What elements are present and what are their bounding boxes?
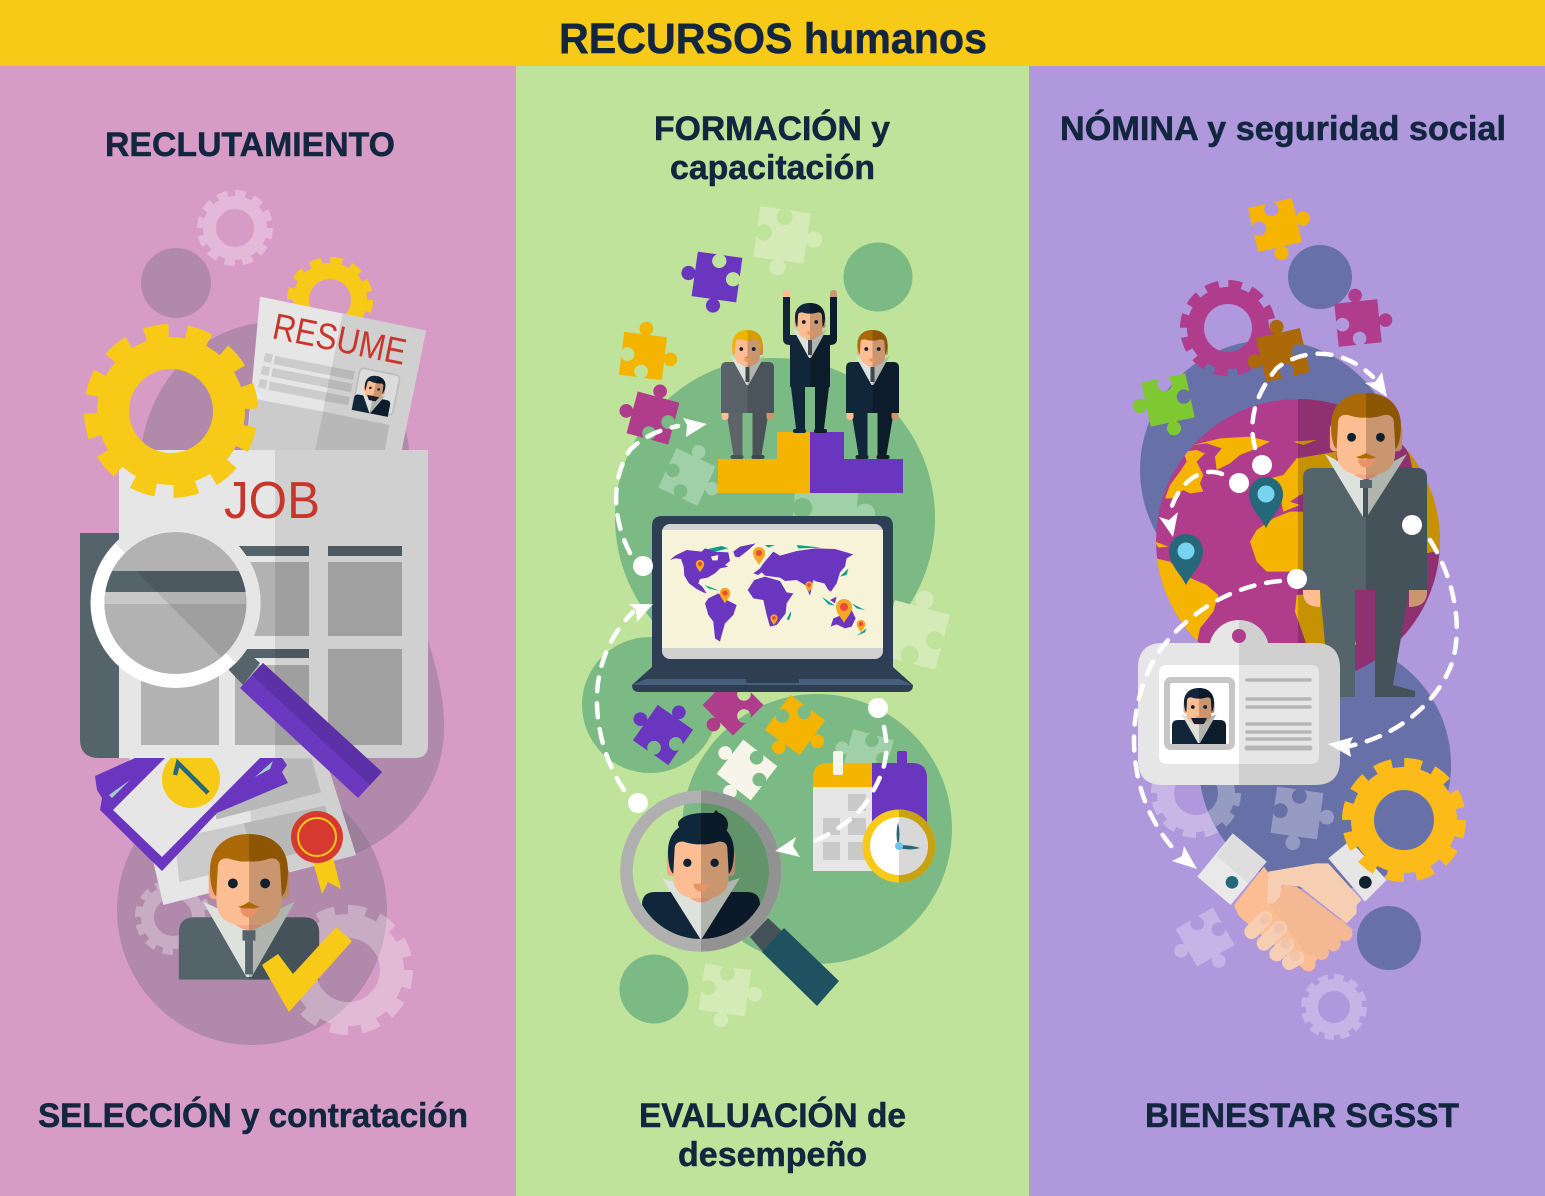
map pins <box>1169 477 1283 585</box>
dashed arrow: around ID card <box>1134 569 1307 869</box>
puzzle: purple <box>676 250 742 316</box>
ribbon seal <box>291 811 343 894</box>
globe <box>1155 399 1442 683</box>
puzzle: magenta <box>614 376 683 444</box>
resume sheet: RESUME <box>269 306 410 373</box>
heading: reclutamiento: RECLUTAMIENTO <box>105 126 395 164</box>
newspaper: JOB <box>224 472 320 530</box>
person: employee <box>1303 393 1427 697</box>
purple ticket stack <box>95 750 288 871</box>
background circles <box>117 248 444 1045</box>
heading: selección y contratación: SELECCIÓN y contratación <box>38 1097 468 1135</box>
gear: yellow <box>1347 763 1461 877</box>
dashed arrow: to laptop <box>597 604 653 813</box>
person: right winner <box>846 330 899 459</box>
puzzle: purple low <box>622 687 700 765</box>
laptop with world map <box>632 516 913 692</box>
header band <box>0 0 1545 66</box>
person: centre winner <box>783 290 837 433</box>
gear: pale bottom left <box>138 882 208 952</box>
handshake <box>1197 833 1387 970</box>
gear: big yellow <box>77 317 265 505</box>
check mark <box>262 927 352 1012</box>
gear: yellow small <box>290 260 370 340</box>
puzzle: behind calendar <box>827 726 894 793</box>
illustration: training and evaluation <box>582 206 954 1032</box>
panel: nómina background <box>1029 65 1545 1196</box>
puzzle: yellow top <box>1248 195 1318 265</box>
dashed arrow: to podium <box>616 418 707 576</box>
magnifier with candidate <box>626 790 839 1006</box>
heading: bienestar sgsst: BIENESTAR SGSST <box>1145 1097 1459 1135</box>
gear: magenta <box>1184 284 1272 372</box>
panel: formación background <box>516 65 1029 1196</box>
heading: evaluación de desempeño: desempeño <box>678 1136 867 1174</box>
heading: formación y capacitación: FORMACIÓN y <box>654 110 890 148</box>
heading: formación y capacitación <box>654 110 890 187</box>
clock <box>862 810 936 882</box>
puzzle: light bottom <box>1164 907 1241 984</box>
puzzle: translucent centre <box>1269 787 1337 855</box>
puzzle: yellow low <box>757 695 836 773</box>
panel: reclutamiento background <box>0 65 516 1196</box>
title: RECURSOS humanos <box>559 15 987 63</box>
background circles <box>1140 245 1451 970</box>
puzzle: cream <box>699 732 777 810</box>
resume sheet <box>246 297 426 450</box>
newspaper <box>80 450 428 758</box>
illustration: payroll and wellbeing <box>1128 195 1461 1037</box>
puzzle: behind laptop <box>791 457 879 546</box>
person: left winner <box>721 330 774 459</box>
magnifying glass <box>98 518 382 798</box>
heading: formación y capacitación: capacitación <box>670 149 875 187</box>
calendar <box>813 751 927 871</box>
illustration: recruitment and selection <box>77 194 444 1045</box>
selected candidate <box>179 834 319 980</box>
light gear bottom <box>1304 977 1364 1037</box>
puzzle: green <box>1128 373 1197 443</box>
puzzle: brown <box>1240 315 1310 385</box>
map pins <box>696 547 865 633</box>
dashed arrow: globe to pin <box>1159 472 1249 537</box>
heading: evaluación de desempeño: EVALUACIÓN de <box>639 1097 906 1135</box>
background circles <box>582 242 952 1024</box>
puzzle: magenta low <box>684 665 764 745</box>
gear: pale top <box>200 194 270 262</box>
ID photo <box>1172 688 1226 744</box>
diploma <box>127 720 356 905</box>
puzzle: pale top <box>751 206 826 281</box>
world map <box>670 543 867 642</box>
gear: pale bottom right <box>288 910 408 1030</box>
resume photo <box>352 372 395 417</box>
light gear left <box>1154 752 1238 834</box>
podium <box>718 432 903 493</box>
dashed arrow: top to employee <box>1252 354 1387 475</box>
puzzle: mid green <box>658 437 733 511</box>
puzzle: yellow <box>619 319 681 382</box>
puzzle: pale bottom <box>697 964 765 1032</box>
dashed arrow: to ID card <box>1328 515 1457 757</box>
puzzle: magenta <box>1333 285 1395 347</box>
ID card <box>1138 620 1340 785</box>
heading: evaluación de desempeño <box>639 1097 906 1174</box>
puzzle: pale right <box>864 579 954 670</box>
heading: nómina y seguridad social: NÓMINA y seguridad social <box>1060 110 1506 148</box>
dashed arrow: to candidate <box>775 698 888 857</box>
